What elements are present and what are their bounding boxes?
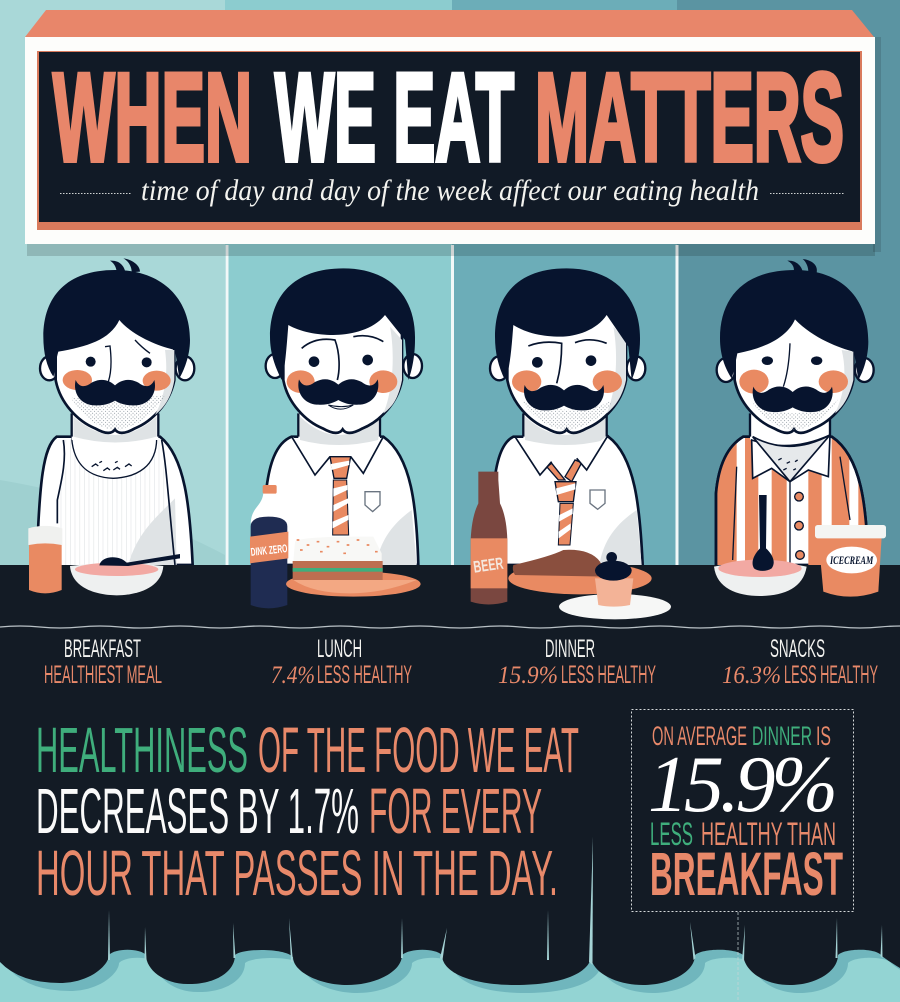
lunch body in shirt — [267, 407, 418, 565]
label: dinner — [498, 635, 656, 689]
label: dinner: LESS HEALTHY — [561, 661, 656, 689]
snacks body in striped shirt — [716, 407, 870, 565]
label: breakfast: BREAKFAST — [64, 635, 141, 663]
dinner head — [490, 268, 645, 433]
subtitle: time of day and day of the week affect our eating health — [141, 174, 759, 207]
man: lunch — [266, 268, 422, 565]
breakfast body in singlet — [37, 407, 193, 565]
beer bottle — [471, 472, 507, 604]
cola bottle — [250, 485, 288, 608]
sandwich on plate — [286, 537, 421, 597]
table edge stitched line — [0, 626, 900, 628]
title: WHEN — [53, 48, 252, 188]
banner panel — [39, 52, 860, 222]
dark table and scalloped curtain — [0, 565, 900, 1002]
callout: dinner vs breakfast: 15.9% — [648, 741, 838, 829]
label: dinner: 15.9% — [498, 662, 558, 689]
label: lunch: 7.4% — [271, 662, 315, 689]
cola bottle: DINK ZERO — [250, 543, 288, 559]
callout: dinner vs breakfast: IS — [816, 721, 831, 751]
label: snacks: SNACKS — [770, 635, 825, 663]
breakfast head — [40, 258, 194, 433]
man: breakfast — [37, 258, 194, 565]
lunch head — [266, 268, 422, 433]
breakfast food: juice and cereal bowl — [28, 526, 180, 595]
man: dinner — [490, 268, 645, 565]
dinner body in shirt — [493, 407, 643, 565]
beer bottle: BEER — [472, 554, 505, 577]
label: dinner: DINNER — [545, 635, 595, 663]
callout: dinner vs breakfast: LESS — [650, 816, 693, 852]
statement text: FOR EVERY — [369, 775, 542, 847]
dinner loose tie — [547, 460, 582, 545]
dinner food: beer, steak and cupcake — [471, 472, 671, 619]
title: WE EAT — [275, 48, 514, 188]
man: snacks — [716, 259, 874, 565]
callout: dinner vs breakfast: ON AVERAGE — [652, 721, 747, 751]
lunch striped tie — [330, 457, 351, 535]
callout: dinner vs breakfast — [632, 710, 854, 912]
statement text: DECREASES BY 1.7% — [36, 775, 359, 847]
white plate and cupcake — [559, 552, 671, 619]
callout: dinner vs breakfast: DINNER — [752, 721, 812, 751]
lunch food: cola bottle and sandwich — [250, 485, 421, 608]
bowl with spoon — [714, 495, 807, 596]
ice cream tub: ICECREAM — [829, 555, 874, 567]
dashed line below callout — [737, 912, 739, 1002]
snack food: bowl and ice cream tub — [714, 495, 886, 597]
title — [53, 48, 844, 188]
statement text: HEALTHINESS — [36, 714, 248, 786]
label: lunch: LESS HEALTHY — [317, 661, 412, 689]
label: lunch — [271, 635, 412, 689]
snacks head — [717, 259, 874, 433]
steak on plate — [508, 550, 652, 594]
meal labels — [44, 635, 878, 689]
statement text — [36, 714, 579, 909]
label: lunch: LUNCH — [317, 635, 362, 663]
banner roof — [25, 10, 874, 37]
ice cream tub — [815, 525, 886, 597]
banner — [25, 10, 875, 244]
label: breakfast: HEALTHIEST MEAL — [44, 661, 162, 689]
label: snacks: 16.3% — [722, 662, 781, 689]
label: snacks — [722, 635, 878, 689]
label: breakfast — [44, 635, 162, 689]
